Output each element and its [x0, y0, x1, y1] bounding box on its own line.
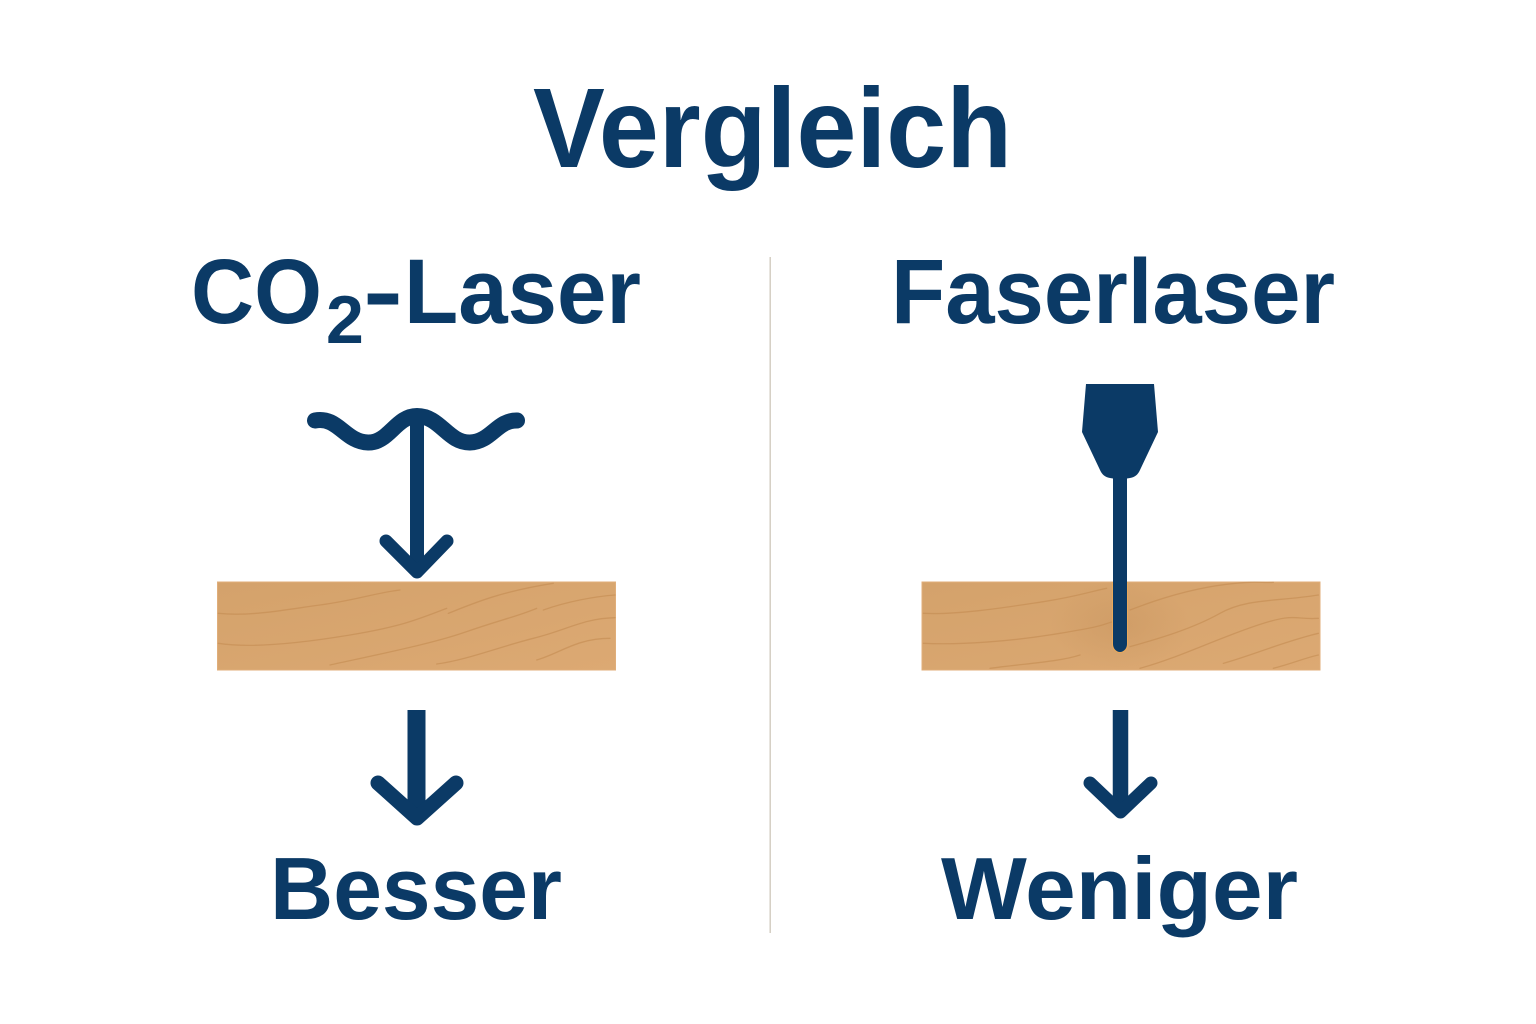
panel: fibre laser: [891, 241, 1335, 938]
icon: fibre laser nozzle and beam: [1082, 384, 1158, 653]
result arrow: [378, 710, 456, 818]
icon: wave with arrow pointing at the wood: [315, 416, 517, 572]
heading: CO2-Laser: CO: [191, 241, 322, 343]
label: Besser: Besser: [270, 839, 562, 938]
heading: CO2-Laser: -: [363, 241, 403, 343]
wood block: [218, 582, 616, 670]
label: Weniger: Weniger: [941, 839, 1298, 938]
panel: CO2 laser: [191, 241, 641, 938]
heading: Faserlaser: Faserlaser: [891, 241, 1335, 343]
title: Vergleich: [533, 65, 1012, 191]
wood block with narrow cut: [922, 581, 1320, 670]
divider between the two columns: [770, 257, 771, 933]
result arrow: [1090, 710, 1151, 812]
heading: CO2-Laser: 2: [326, 282, 364, 358]
heading: CO2-Laser: Laser: [404, 241, 641, 343]
